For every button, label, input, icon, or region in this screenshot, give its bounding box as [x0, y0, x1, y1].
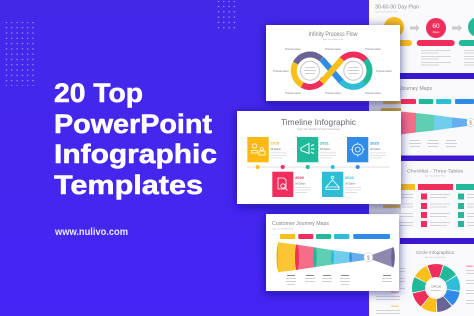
process labels: Process Here — [325, 47, 341, 51]
panel: customer journey maps — [266, 214, 399, 291]
stage pills — [280, 234, 390, 239]
card: 2020: 00 Option — [295, 182, 306, 186]
customer journey content: Type Your Subtitle Here — [272, 228, 294, 230]
infinity loop — [288, 48, 376, 94]
funnel captions — [286, 275, 392, 285]
infinity slide content: Type Your Subtitle Here — [322, 38, 344, 41]
title: Infographic — [54, 139, 217, 169]
panel: 30-60-90 day plan: 30-60-90 Day Plan — [375, 4, 419, 10]
process labels: Process Here — [365, 47, 381, 51]
panel: 30-60-90 day plan — [369, 0, 474, 73]
panel: right column backing — [369, 0, 474, 316]
website url: www.nulivo.com — [54, 226, 128, 238]
card: 2023 — [347, 137, 386, 162]
timeline content: Type The Subtitle Of Your Great Here — [297, 127, 341, 131]
title: Templates — [54, 170, 203, 200]
process labels: Process Here — [376, 69, 392, 73]
title: PowerPoint — [54, 109, 212, 139]
dot pattern: top — [214, 1, 239, 32]
dot pattern: left — [3, 22, 35, 86]
card: 2022: 00 Option — [345, 182, 356, 186]
process labels — [273, 47, 392, 95]
card: 2019: 00 Option — [270, 148, 282, 151]
panel: checklist three tables: Type Your Subtitle Here — [424, 174, 446, 178]
infinity slide content — [273, 32, 392, 95]
band: divider under day plan — [400, 73, 474, 79]
panel: 30-60-90 day plan: Type Your Subtitle Here — [375, 10, 399, 14]
process labels: Process Here — [273, 69, 289, 73]
fragment: hidden slide strip above timeline — [369, 100, 401, 112]
heading: Customer Journey Maps — [272, 221, 329, 227]
panel: timeline infographic — [237, 111, 401, 204]
panel: 30-60-90 day plan: 60 — [432, 23, 440, 30]
band: divider under journey maps — [400, 156, 474, 161]
timeline axis — [247, 166, 390, 168]
panel: journey maps: Journey Maps — [400, 86, 432, 92]
timeline dots — [256, 165, 360, 169]
panel: circle infographics: Type Your Subtitle Here — [424, 256, 446, 259]
panel: journey maps — [369, 79, 474, 156]
process labels: Process Here — [365, 91, 381, 95]
card: 2023: 2023 — [370, 140, 380, 146]
panel: circle infographics: Option — [391, 304, 400, 308]
checkboxes: red — [421, 194, 427, 227]
panel: circle infographics: Option — [466, 265, 474, 268]
card: 2021: 00 Option — [320, 148, 331, 151]
card: 2022 — [322, 172, 361, 197]
band: divider above circle slide — [400, 238, 474, 244]
fragment: hidden slide strip below timeline — [369, 204, 401, 214]
process labels: Process Here — [285, 47, 301, 51]
card: 2021: 2021 — [320, 140, 330, 146]
donut wheel — [411, 263, 461, 313]
panel: circle infographics: Circle Infographics — [416, 250, 455, 256]
card: 2020: 2020 — [295, 175, 305, 180]
card: 2019 — [247, 137, 286, 162]
panel: circle infographics: CIRCLE — [431, 284, 441, 288]
text snippets: lower column: Option — [391, 290, 400, 294]
process labels: Process Here — [325, 91, 341, 95]
panel: circle infographics: Infographic — [431, 290, 441, 292]
process labels: Process Here — [285, 91, 301, 95]
card: 2021 — [297, 137, 336, 162]
panel: 30-60-90 day plan: Days — [433, 30, 440, 34]
heading: Infinity Process Flow — [308, 32, 358, 38]
panel: journey maps: $ — [469, 120, 472, 126]
funnel chart: $ — [367, 255, 370, 261]
card: 2023: 00 Option — [370, 148, 381, 151]
panel: checklist three tables — [369, 161, 474, 238]
panel: infinity process flow — [266, 25, 400, 101]
checkboxes: teal — [458, 194, 464, 227]
timeline content — [247, 117, 390, 197]
heading: Timeline Infographic — [281, 117, 357, 127]
panel: checklist three tables: Checklist - Three Tables — [407, 168, 464, 174]
card: 2022: 2022 — [345, 175, 355, 180]
title — [54, 78, 217, 200]
card: 2019: 2019 — [270, 140, 280, 146]
title: 20 Top — [54, 78, 143, 108]
customer journey content — [272, 221, 395, 285]
card: 2020 — [272, 172, 311, 197]
panel: circle infographics — [369, 244, 474, 316]
